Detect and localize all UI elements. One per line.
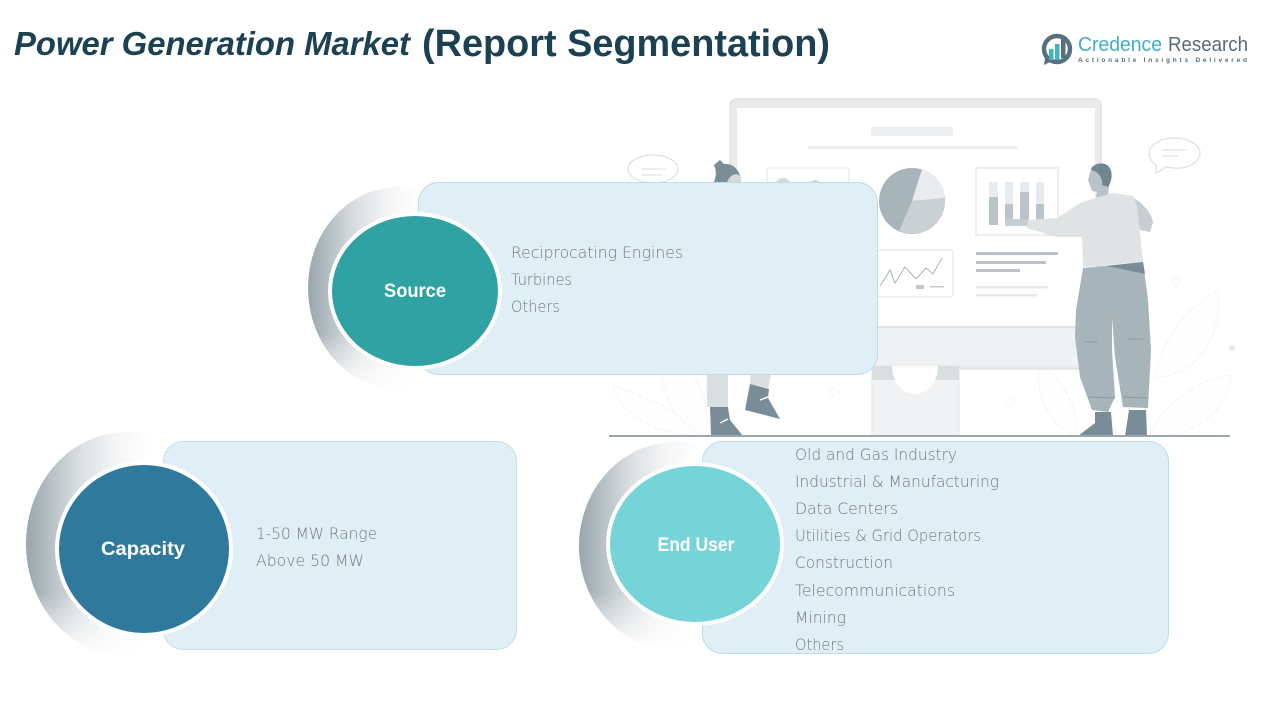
panel: end user bbox=[578, 441, 1168, 654]
speech bubble right bbox=[1149, 138, 1200, 173]
man: belt shadow bbox=[1107, 262, 1145, 274]
capacity crescent fade bbox=[25, 431, 227, 657]
title: report segmentation: (Report Segmentation) bbox=[422, 23, 830, 65]
end user circle bbox=[608, 464, 782, 624]
logo tagline: Actionable Insights Delivered bbox=[1078, 57, 1247, 64]
source label: Source bbox=[384, 281, 446, 302]
end user items: Others bbox=[795, 635, 844, 654]
capacity items bbox=[256, 524, 377, 570]
panel: source bbox=[307, 182, 878, 390]
end user items: Telecommunications bbox=[795, 581, 955, 600]
speech bubble left bbox=[628, 155, 678, 183]
end user items: Mining bbox=[795, 608, 846, 627]
logo wordmark: Credence: Credence bbox=[1078, 34, 1162, 56]
illustration: presenters at monitor bbox=[609, 99, 1235, 437]
capacity items: Above 50 MW bbox=[256, 551, 364, 570]
end user items: Industrial & Manufacturing bbox=[795, 472, 999, 491]
source items: Others bbox=[511, 297, 560, 316]
source items: Reciprocating Engines bbox=[511, 243, 683, 262]
monitor bbox=[730, 99, 1101, 436]
title: market name: Power Generation Market bbox=[14, 25, 412, 62]
man figure bbox=[1027, 163, 1153, 436]
source items bbox=[511, 243, 683, 316]
end user crescent fade bbox=[578, 441, 772, 651]
capacity circle bbox=[57, 463, 231, 635]
logo: Credence Research bbox=[1044, 34, 1248, 65]
end user card bbox=[702, 442, 1168, 654]
man: face bbox=[1088, 166, 1110, 197]
panel: capacity bbox=[25, 431, 516, 657]
floor line bbox=[609, 435, 1230, 437]
logo wordmark: Research: Research bbox=[1168, 34, 1248, 56]
source items: Turbines bbox=[511, 270, 572, 289]
screen: line chart bbox=[860, 250, 953, 297]
capacity crescent bbox=[26, 432, 226, 656]
source crescent fade bbox=[307, 186, 489, 390]
capacity card bbox=[164, 442, 516, 650]
source circle bbox=[330, 214, 500, 368]
source card bbox=[418, 182, 878, 374]
end user items: Utilities & Grid Operators bbox=[795, 526, 981, 545]
end user items: Old and Gas Industry bbox=[795, 445, 957, 464]
title bbox=[14, 23, 830, 65]
man: hair bbox=[1091, 163, 1112, 187]
man: back arm bbox=[1130, 196, 1153, 232]
screen: heading placeholder bbox=[808, 127, 1018, 149]
end user items: Construction bbox=[795, 553, 893, 572]
screen: text lines bbox=[976, 252, 1058, 296]
end user label: End User bbox=[658, 535, 735, 556]
end user items bbox=[795, 445, 999, 654]
man: torso and arm bbox=[1027, 193, 1143, 267]
screen: image card bbox=[767, 168, 849, 198]
woman figure bbox=[707, 160, 780, 436]
screen: bar chart bbox=[976, 168, 1058, 235]
man: trouser creases bbox=[1083, 339, 1148, 398]
capacity label: Capacity bbox=[101, 539, 185, 560]
man: trousers bbox=[1075, 262, 1151, 412]
end user items: Data Centers bbox=[795, 499, 898, 518]
background leaves bbox=[612, 277, 1232, 436]
icon: logo ring with bars bbox=[1044, 36, 1070, 65]
man: shoes bbox=[1078, 412, 1113, 436]
screen: pie chart bbox=[879, 168, 945, 234]
end user crescent bbox=[579, 442, 771, 650]
source crescent bbox=[308, 187, 488, 389]
capacity items: 1-50 MW Range bbox=[256, 524, 377, 543]
dot bbox=[1229, 345, 1235, 351]
